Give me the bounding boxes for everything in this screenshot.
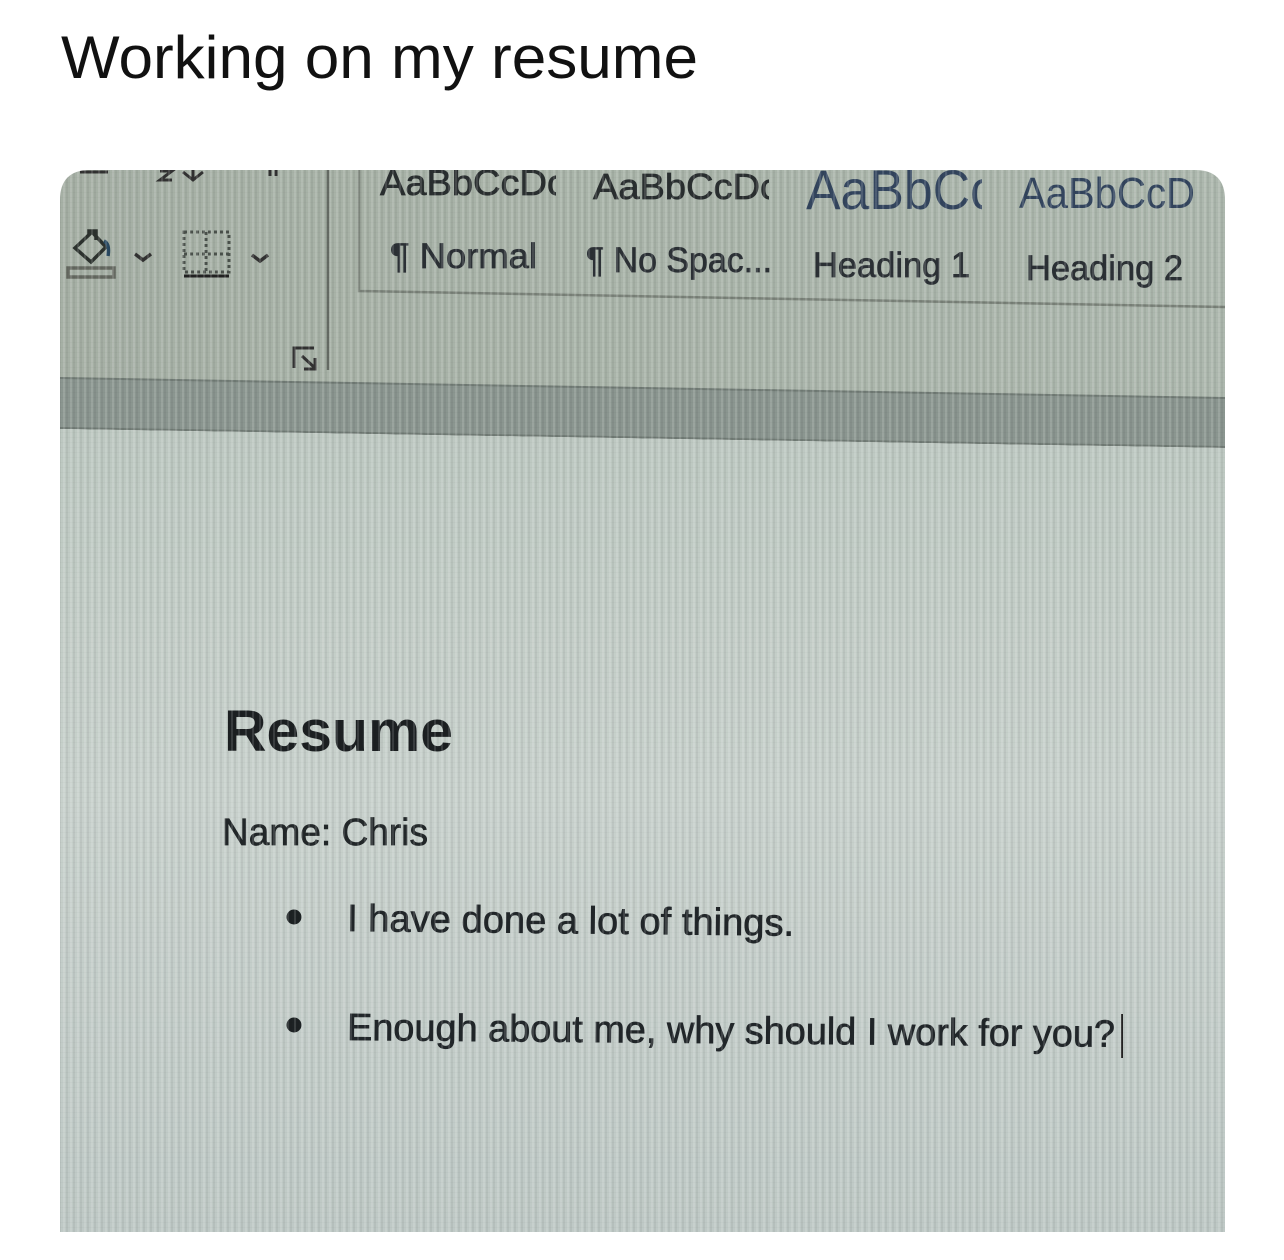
style previews: AaBbCcDc bbox=[1019, 169, 1215, 218]
icon: dropdown chevron 2 bbox=[252, 255, 268, 261]
style names: Heading 2 bbox=[1026, 249, 1183, 288]
screen pixel texture bbox=[60, 170, 1225, 1232]
style previews: AaBbCcDc bbox=[380, 162, 566, 203]
title: Working on my resume bbox=[61, 24, 698, 91]
panel: document page bbox=[60, 429, 1225, 1232]
name line: Name: Chris bbox=[222, 812, 428, 854]
style previews bbox=[380, 170, 1193, 210]
style names bbox=[391, 242, 1182, 288]
icon: paint bucket bbox=[68, 231, 114, 277]
icon: borders grid bbox=[184, 232, 229, 276]
icon: dropdown chevron bbox=[135, 254, 151, 260]
icon: top toolbar fragments bbox=[80, 170, 276, 180]
heading: resume: Resume bbox=[224, 699, 453, 764]
panel: word ribbon bbox=[60, 158, 1225, 400]
ruler band bbox=[60, 378, 1225, 447]
bullet 2: Enough about me, why should I work for you? bbox=[347, 1007, 1115, 1056]
style names: Heading 1 bbox=[813, 246, 970, 285]
bullet 1: I have done a lot of things. bbox=[347, 898, 794, 945]
style names: ¶ Normal bbox=[390, 237, 537, 276]
ribbon divider bbox=[327, 170, 329, 370]
style previews: AaBbCc bbox=[806, 158, 996, 221]
screenshot photo bbox=[60, 158, 1225, 1232]
style previews: AaBbCcDc bbox=[593, 166, 779, 207]
style names: ¶ No Spac... bbox=[586, 241, 772, 280]
styles gallery box bbox=[359, 170, 1225, 307]
icon: dialog launcher bbox=[294, 348, 315, 369]
text cursor bbox=[1121, 1014, 1123, 1058]
